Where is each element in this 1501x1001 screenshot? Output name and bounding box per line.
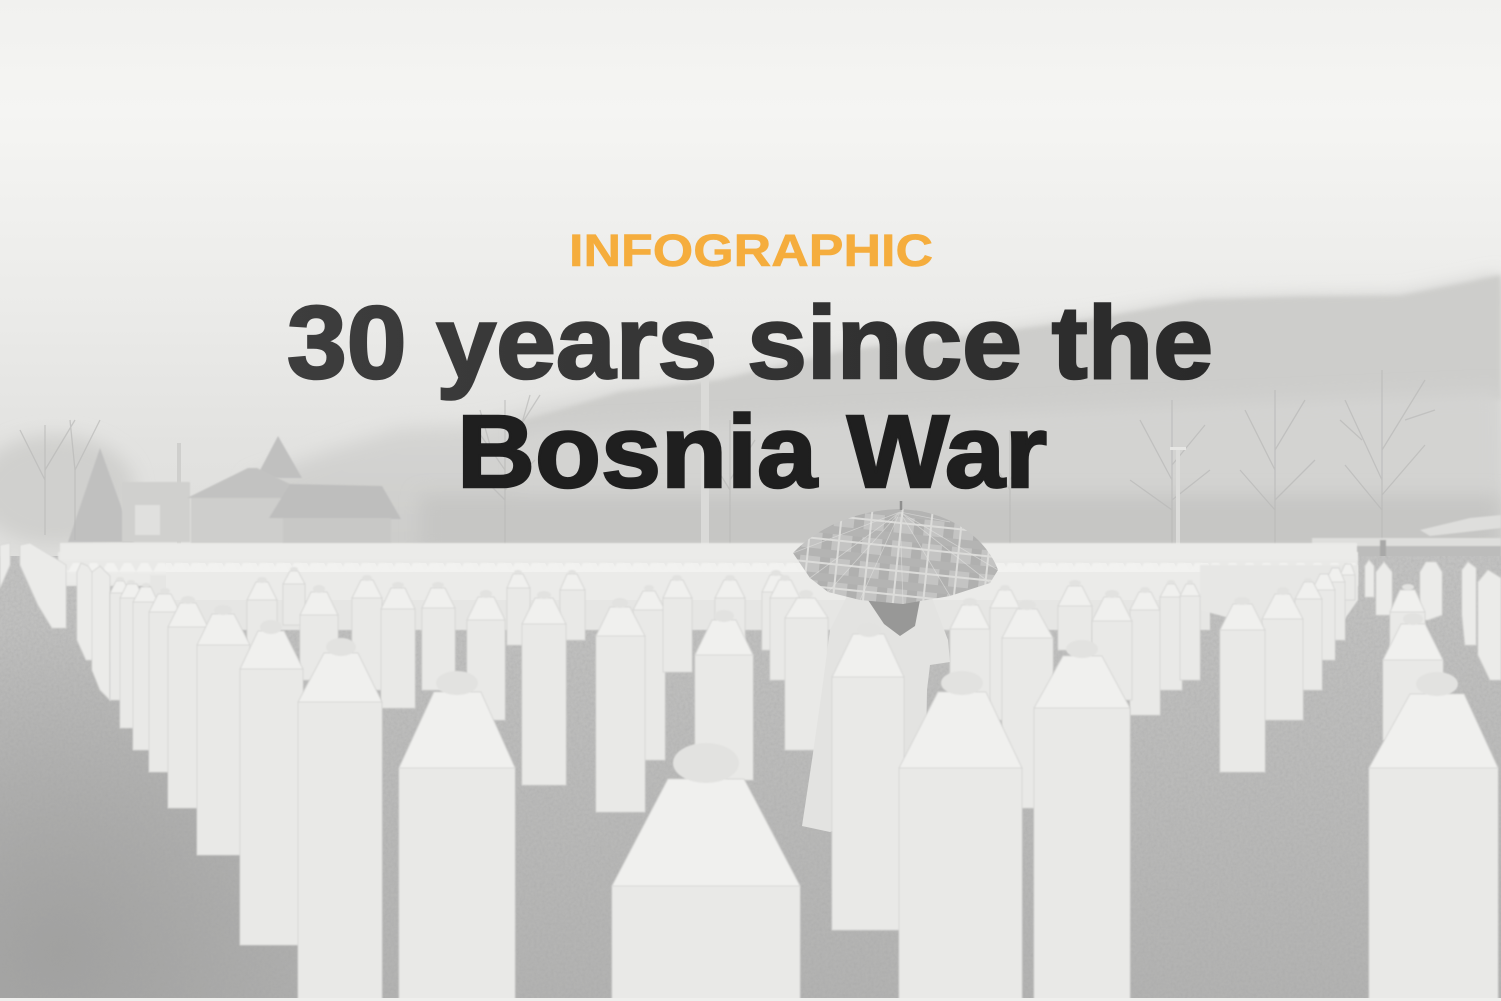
ferrule xyxy=(900,501,902,510)
sky background xyxy=(0,0,1501,560)
eyebrow label: INFOGRAPHIC xyxy=(569,225,933,276)
middle headstones xyxy=(110,564,1425,772)
near headstones behind woman xyxy=(168,590,1443,855)
distant wall and fence xyxy=(1312,515,1501,566)
stone centre 1 xyxy=(832,623,904,930)
text block xyxy=(287,225,1213,509)
stone front xyxy=(612,743,800,1001)
bottom edge xyxy=(0,998,1501,1001)
title line 1: 30 years since the xyxy=(287,285,1213,400)
left edge row xyxy=(0,543,110,700)
foreground headstones xyxy=(240,620,1498,1001)
coat xyxy=(802,594,950,832)
poles xyxy=(177,325,1186,615)
canopy xyxy=(793,509,998,604)
stone centre 2 xyxy=(899,671,1022,1001)
ground xyxy=(0,556,1501,1001)
distant hills xyxy=(250,275,1501,570)
umbrella xyxy=(793,501,998,604)
ground texture xyxy=(0,556,1501,1001)
darker lower-left ground xyxy=(0,600,400,1001)
woman with umbrella xyxy=(793,501,998,832)
stone left 2 xyxy=(298,638,382,1001)
right edge rows xyxy=(1365,560,1501,680)
stone far right xyxy=(1369,672,1498,1001)
stone left 1 xyxy=(240,620,303,945)
title line 2: Bosnia War xyxy=(457,394,1047,509)
stone left 3 xyxy=(399,671,515,1001)
bare trees xyxy=(20,370,1435,560)
coat collar shadow xyxy=(866,597,920,636)
stone right 1 xyxy=(1034,640,1130,1001)
houses xyxy=(122,468,401,546)
canopy ribs xyxy=(793,512,998,604)
treeline xyxy=(0,435,1501,555)
far rows of headstones xyxy=(58,543,1358,640)
